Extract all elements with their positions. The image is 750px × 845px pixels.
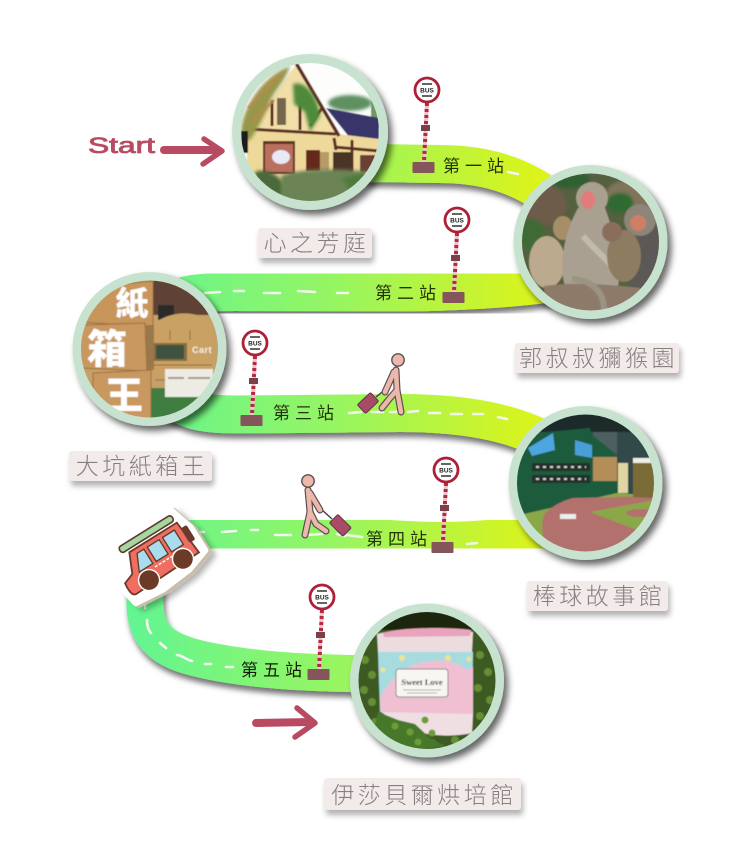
station label: 第三站: 第三站 [273,404,339,423]
road: segment five [145,585,375,674]
stop three photo circle [72,272,226,426]
bus stop one [412,78,439,173]
station label: 第四站: 第四站 [366,530,432,549]
stop four photo circle [508,406,662,560]
stop one photo circle [232,54,388,210]
bus stop five [308,585,334,680]
label: 棒球故事館: 棒球故事館 [533,583,665,609]
label: 郭叔叔獼猴園: 郭叔叔獼猴園 [519,345,678,371]
road dashes [145,172,518,667]
station label: 第一站: 第一站 [443,157,509,176]
bus stop five: BUS [315,594,330,602]
stop three photo circle: 箱 [87,328,127,372]
station label: 第五站: 第五站 [241,661,307,680]
label: 心之芳庭: 心之芳庭 [264,230,370,256]
road: segment one [365,163,565,210]
label: 大坑紙箱王: 大坑紙箱王 [76,453,208,479]
stop three photo circle: Cart [192,345,212,355]
bus stop two: BUS [450,218,465,224]
station label: 第二站: 第二站 [375,284,441,303]
stop five photo circle: Sweet Love [401,677,443,687]
stop two photo circle [514,165,668,319]
stop three photo circle: 紙 [116,285,148,322]
walker with suitcase on road four [302,475,351,536]
bus stop four: BUS [439,468,454,474]
arrow: start [164,139,222,164]
arrow: finish [256,708,315,737]
stop three photo circle: 王 [105,376,143,418]
road: segment three [170,398,565,452]
bus stop one: BUS [420,88,435,94]
road: segment two [165,282,560,303]
bus stop two [442,208,469,303]
bus stop three [240,331,267,426]
label: 伊莎貝爾烘培館: 伊莎貝爾烘培館 [331,782,517,808]
van sticker [99,504,215,611]
walker with suitcase on road three [357,354,404,414]
road: segment four [170,526,555,541]
start label: Start [88,133,155,158]
stop five photo circle [350,604,504,758]
bus stop four [432,458,458,553]
bus stop three: BUS [248,340,263,348]
